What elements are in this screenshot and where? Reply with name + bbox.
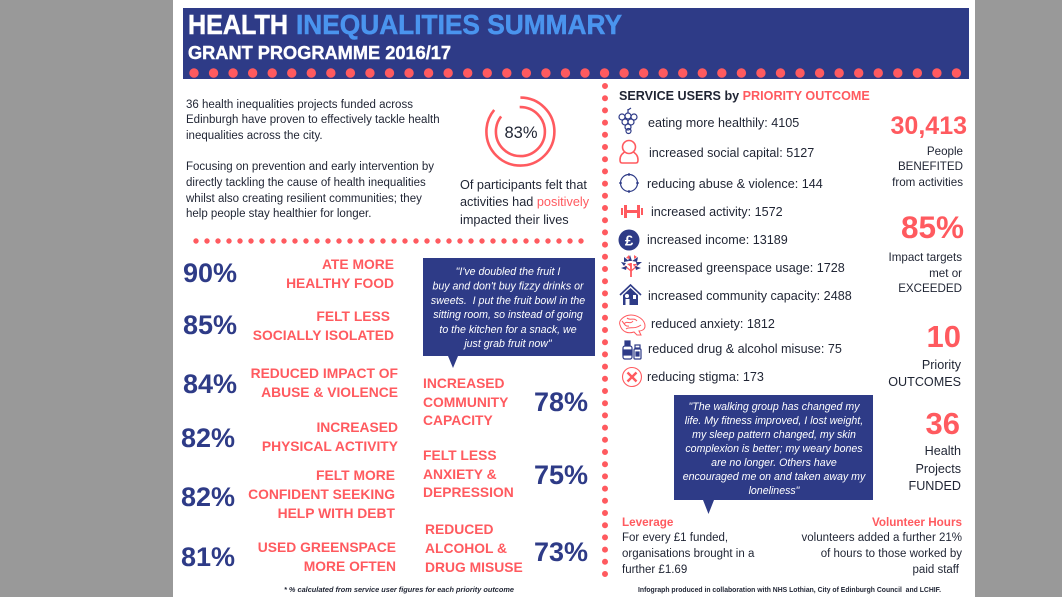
outcome: eating more healthily — [619, 108, 799, 134]
heading: service users: SERVICE USERS by PRIORITY OUTCOME — [619, 89, 870, 103]
callout: fruit quote: to the kitchen for a snack, we — [439, 324, 577, 336]
icon: cross circle — [622, 368, 642, 386]
stat: 85% felt less socially isolated: SOCIALLY ISOLATED — [253, 327, 394, 343]
stat: 85% felt less socially isolated: 85% — [183, 310, 237, 340]
stat: 78% community capacity: 78% — [534, 387, 588, 417]
stat: 36 health projects: Projects — [916, 462, 961, 476]
stat: 82% confident seeking help: HELP WITH DEBT — [278, 505, 396, 521]
stat: 10 priority outcomes: OUTCOMES — [888, 375, 961, 389]
outcome: activity: increased activity: 1572 — [651, 205, 783, 219]
outcome: income — [618, 230, 788, 250]
intro text: 36 health inequalities projects funded across — [186, 99, 413, 111]
stat: 82% confident seeking help: CONFIDENT SEEKING — [248, 486, 395, 502]
stat: 82% confident seeking help: FELT MORE — [316, 467, 395, 483]
callout: fruit quote — [423, 258, 595, 368]
stat: 75% anxiety and depression — [423, 447, 588, 500]
icon: grapes — [619, 108, 637, 134]
volunteer hours text: Volunteer Hours — [872, 516, 962, 529]
outcome: greenspace — [621, 255, 845, 277]
icon: house — [620, 285, 641, 305]
callout: walking group quote — [674, 395, 873, 514]
stat: 73% alcohol and drug misuse: 73% — [534, 537, 588, 567]
outcome: community capacity: increased community capacity: 2488 — [648, 289, 852, 303]
intro text: Edinburgh have proven to effectively tackle health — [186, 114, 440, 126]
outcome: abuse and violence: reducing abuse & violence: 144 — [647, 177, 823, 191]
callout: fruit quote: buy and don't buy fizzy drinks or — [432, 280, 584, 292]
leverage text: For every £1 funded, — [622, 532, 728, 544]
stat: 82% confident seeking help — [181, 467, 396, 521]
intro text: help people stay healthier for longer. — [186, 208, 371, 220]
callout: fruit quote: sweets. I put the fruit bowl in the — [431, 295, 585, 307]
icon: tree — [621, 255, 642, 277]
participants caption: activities had positively — [460, 195, 590, 209]
stat: 90% ate more healthy food: ATE MORE — [322, 256, 394, 272]
icon: pound coin: £ — [625, 232, 634, 250]
stat: 75% anxiety and depression: DEPRESSION — [423, 484, 514, 500]
stat: 30,413 people: 30,413 — [891, 112, 967, 140]
stat: 82% confident seeking help: 82% — [181, 482, 235, 512]
icon: bottles — [623, 341, 641, 359]
volunteer hours text: volunteers added a further 21% — [802, 532, 962, 544]
stat: 78% community capacity: INCREASED — [423, 375, 505, 391]
outcome: anxiety — [620, 315, 775, 335]
stat: 36 health projects — [909, 406, 961, 493]
stat: 30,413 people: People — [927, 145, 963, 158]
stat: 10 priority outcomes — [888, 319, 962, 389]
icon: person — [620, 140, 638, 163]
outcome: income: increased income: 13189 — [647, 233, 788, 247]
title: HEALTH — [188, 9, 288, 40]
stat: 81% used greenspace: MORE OFTEN — [304, 558, 396, 574]
participants caption: Of participants felt that — [460, 178, 587, 192]
intro text — [185, 99, 440, 220]
credit line: Infograph produced in collaboration with NHS Lothian, City of Edinburgh Council and LCHIF. — [638, 585, 941, 594]
footnote: * % calculated from service user figures for each priority outcome — [284, 585, 515, 594]
stat: 75% anxiety and depression: 75% — [534, 460, 588, 490]
outcome: drug and alcohol — [623, 341, 842, 359]
volunteer hours text — [802, 516, 962, 576]
outcome: greenspace: increased greenspace usage: 1728 — [648, 261, 845, 275]
callout: walking group quote: are no longer. Others have — [711, 457, 837, 469]
volunteer hours text: of hours to those worked by — [821, 548, 962, 560]
stat: 82% increased physical activity: PHYSICAL ACTIVITY — [262, 438, 399, 454]
participants caption — [460, 178, 590, 227]
header banner — [183, 8, 969, 79]
callout: walking group quote: life. My fitness improved, I lost weight, — [685, 415, 863, 427]
callout: walking group quote: my sleep pattern changed, my skin — [692, 429, 856, 441]
stat: 73% alcohol and drug misuse: DRUG MISUSE — [425, 559, 523, 575]
donut: 83%: 83% — [504, 124, 538, 142]
stat: 82% increased physical activity — [181, 419, 399, 454]
icon: dumbbell — [621, 205, 643, 218]
outcome: anxiety: reduced anxiety: 1812 — [651, 317, 775, 331]
intro text: inequalities across the city. — [186, 130, 323, 142]
stat: 85% impact targets — [889, 209, 964, 295]
stat: 30,413 people: from activities — [892, 176, 963, 189]
stat: 78% community capacity: CAPACITY — [423, 412, 493, 428]
outcome: social capital — [620, 140, 814, 163]
intro text: whilst also creating resilient communities; they — [185, 193, 422, 205]
callout: fruit quote: "I've doubled the fruit I — [456, 266, 560, 278]
intro text: Focusing on prevention and early intervention by — [186, 161, 434, 173]
volunteer hours text: paid staff — [913, 564, 960, 576]
intro text: directly tackling the cause of health inequalities — [186, 177, 426, 189]
subtitle: GRANT PROGRAMME 2016/17 — [188, 43, 451, 63]
stat: 10 priority outcomes: Priority — [922, 358, 962, 372]
stat: 85% felt less socially isolated — [183, 308, 394, 343]
leverage text: organisations brought in a — [622, 548, 755, 560]
stat: 90% ate more healthy food: 90% — [183, 258, 237, 288]
stat: 90% ate more healthy food: HEALTHY FOOD — [286, 275, 394, 291]
stat: 36 health projects: Health — [925, 444, 961, 458]
outcome: social capital: increased social capital: 5127 — [649, 146, 814, 160]
stat: 84% reduced impact of abuse — [183, 365, 398, 400]
stat: 81% used greenspace — [181, 539, 396, 574]
stat: 85% impact targets: met or — [929, 267, 962, 280]
stat: 78% community capacity — [423, 375, 588, 428]
participants caption: impacted their lives — [460, 213, 569, 227]
callout: fruit quote: just grab fruit now" — [462, 338, 553, 350]
outcome: stigma: reducing stigma: 173 — [647, 370, 764, 384]
stat: 84% reduced impact of abuse: ABUSE & VIOLENCE — [261, 384, 398, 400]
leverage text: Leverage — [622, 516, 674, 529]
callout: fruit quote: sitting room, so instead of going — [433, 309, 583, 321]
stat: 85% impact targets: Impact targets — [889, 251, 962, 264]
leverage text — [622, 516, 755, 576]
stat: 73% alcohol and drug misuse: REDUCED — [425, 521, 493, 537]
stat: 90% ate more healthy food — [183, 256, 394, 291]
callout: walking group quote: encouraged me on and taken away my — [683, 471, 866, 483]
stat: 84% reduced impact of abuse: REDUCED IMPACT OF — [251, 365, 398, 381]
stat: 75% anxiety and depression: FELT LESS — [423, 447, 497, 463]
callout: walking group quote: "The walking group has changed my — [688, 401, 860, 413]
callout: walking group quote: complexion is better; my weary bones — [685, 443, 863, 455]
outcome: abuse and violence — [619, 173, 823, 193]
stat: 82% increased physical activity: INCREASED — [316, 419, 398, 435]
stat: 84% reduced impact of abuse: 84% — [183, 369, 237, 399]
stat: 75% anxiety and depression: ANXIETY & — [423, 466, 497, 482]
icon: brain — [620, 315, 645, 335]
callout: walking group quote: loneliness" — [749, 485, 801, 497]
stat: 36 health projects: FUNDED — [909, 479, 961, 493]
outcome: drug and alcohol: reduced drug & alcohol misuse: 75 — [648, 342, 842, 356]
stat: 36 health projects: 36 — [926, 406, 960, 441]
outcome: stigma — [622, 368, 764, 386]
stat: 85% impact targets: 85% — [901, 209, 964, 245]
icon: target circle — [619, 173, 639, 193]
stat: 85% impact targets: EXCEEDED — [898, 282, 962, 295]
stat: 30,413 people: BENEFITED — [898, 160, 963, 173]
stat: 81% used greenspace: USED GREENSPACE — [258, 539, 396, 555]
donut: 83% — [486, 98, 554, 166]
stat: 78% community capacity: COMMUNITY — [423, 394, 509, 410]
stat: 81% used greenspace: 81% — [181, 542, 235, 572]
stat: 82% increased physical activity: 82% — [181, 423, 235, 453]
stat: 30,413 people — [891, 112, 967, 189]
stat: 10 priority outcomes: 10 — [927, 319, 961, 354]
icon: pound coin — [618, 230, 640, 250]
outcome: community capacity — [620, 285, 852, 305]
title: INEQUALITIES SUMMARY — [296, 9, 622, 40]
stat: 73% alcohol and drug misuse — [425, 521, 588, 575]
stat: 73% alcohol and drug misuse: ALCOHOL & — [425, 540, 507, 556]
leverage text: further £1.69 — [622, 564, 687, 576]
stat: 85% felt less socially isolated: FELT LESS — [316, 308, 390, 324]
outcome: eating more healthily: eating more healthily: 4105 — [648, 116, 799, 130]
